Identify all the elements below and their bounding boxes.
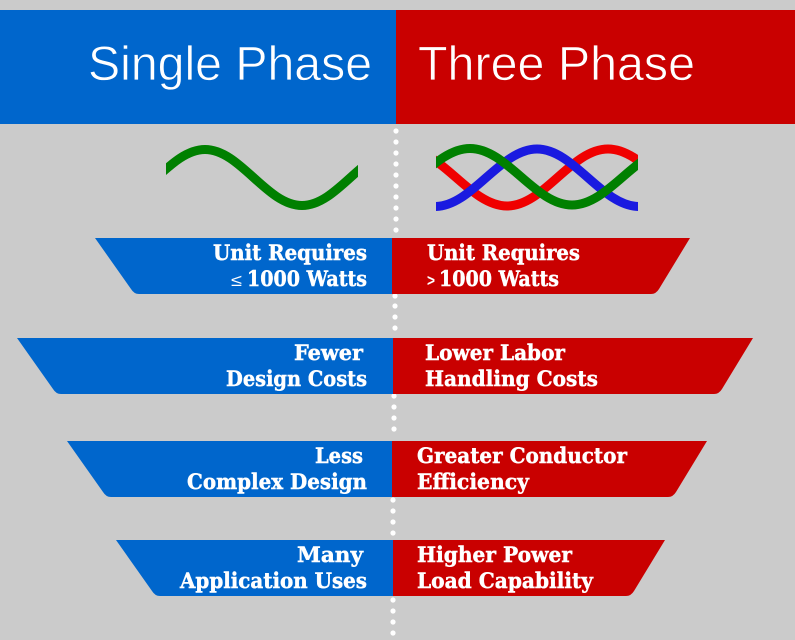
row 1: unit requires, single phase: 1000 Watts [247, 267, 367, 292]
row 1: unit requires, three phase: > [427, 271, 435, 290]
row 3: conductor efficiency, three phase: Greater Conductor [417, 444, 628, 469]
row 1: unit requires, single phase: Unit Requires [213, 241, 367, 266]
row 2: design costs, single phase [17, 338, 394, 394]
row 1: unit requires, single phase [95, 238, 393, 294]
row 2: labor costs, three phase [393, 338, 753, 394]
row 4: applications, single phase: Many [297, 543, 364, 568]
icon: three phase sine waves [436, 144, 638, 211]
row 3: complexity, single phase: Less [315, 444, 363, 469]
row 2: design costs, single phase: Fewer [294, 341, 364, 366]
header: Single Phase: Single Phase [88, 38, 372, 91]
row 3: complexity, single phase [67, 441, 393, 497]
header: Three Phase: Three Phase [418, 38, 695, 91]
row 1: unit requires, three phase: 1000 Watts [439, 267, 559, 292]
header: Three Phase [396, 10, 795, 124]
row 4: applications, single phase: Application Uses [179, 569, 367, 594]
centre dotted divider [390, 128, 399, 636]
row 2: labor costs, three phase: Handling Costs [425, 367, 598, 392]
header: Single Phase [0, 10, 396, 124]
icon: single phase sine wave [166, 145, 358, 210]
row 4: load capability, three phase [393, 540, 665, 596]
row 3: complexity, single phase: Complex Design [187, 470, 367, 495]
row 4: applications, single phase [116, 540, 394, 596]
row 4: load capability, three phase: Load Capability [417, 569, 593, 594]
row 1: unit requires, three phase: Unit Requires [427, 241, 580, 266]
row 3: conductor efficiency, three phase [392, 441, 707, 497]
row 1: unit requires, three phase [392, 238, 690, 294]
row 1: unit requires, single phase: ≤ [231, 271, 242, 290]
row 3: conductor efficiency, three phase: Efficiency [417, 470, 529, 495]
row 4: load capability, three phase: Higher Power [417, 543, 573, 568]
row 2: labor costs, three phase: Lower Labor [425, 341, 566, 366]
row 2: design costs, single phase: Design Costs [226, 367, 367, 392]
